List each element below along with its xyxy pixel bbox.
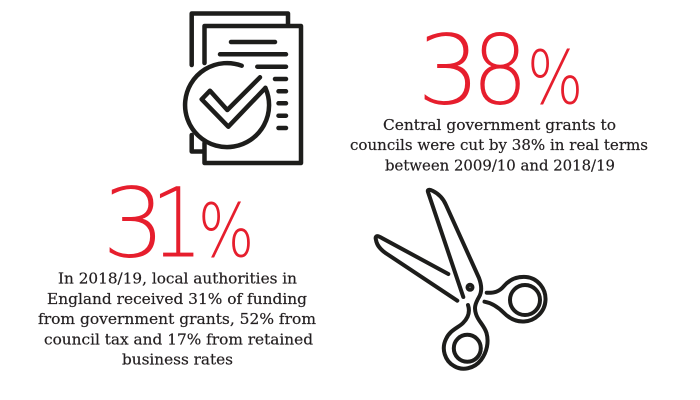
text: local authority funding: England received 31% of funding — [47, 292, 307, 308]
statistic: 38% — [417, 14, 583, 127]
text: central government grants — [350, 118, 648, 174]
text: central government grants: Central government grants to — [383, 118, 616, 134]
text: local authority funding: business rates — [122, 352, 233, 368]
statistic: 31% — [102, 168, 254, 280]
text: local authority funding — [38, 272, 316, 368]
text: central government grants: between 2009/10 and 2018/19 — [385, 158, 615, 174]
statistic: 38%: % — [527, 35, 583, 121]
icon: document with checkmark — [185, 14, 301, 163]
statistic: 31%: 3 — [102, 168, 166, 280]
text: local authority funding: from government grants, 52% from — [38, 312, 316, 328]
text: central government grants: councils were cut by 38% in real terms — [350, 138, 648, 154]
statistic: 38%: 3 — [417, 15, 481, 127]
text: local authority funding: council tax and 17% from retained — [44, 332, 313, 348]
icon: scissors — [376, 190, 546, 369]
statistic: 38%: 8 — [472, 14, 528, 126]
text: local authority funding: In 2018/19, local authorities in — [58, 272, 297, 288]
statistic: 31%: % — [198, 188, 254, 274]
statistic: 31%: 1 — [151, 168, 203, 280]
